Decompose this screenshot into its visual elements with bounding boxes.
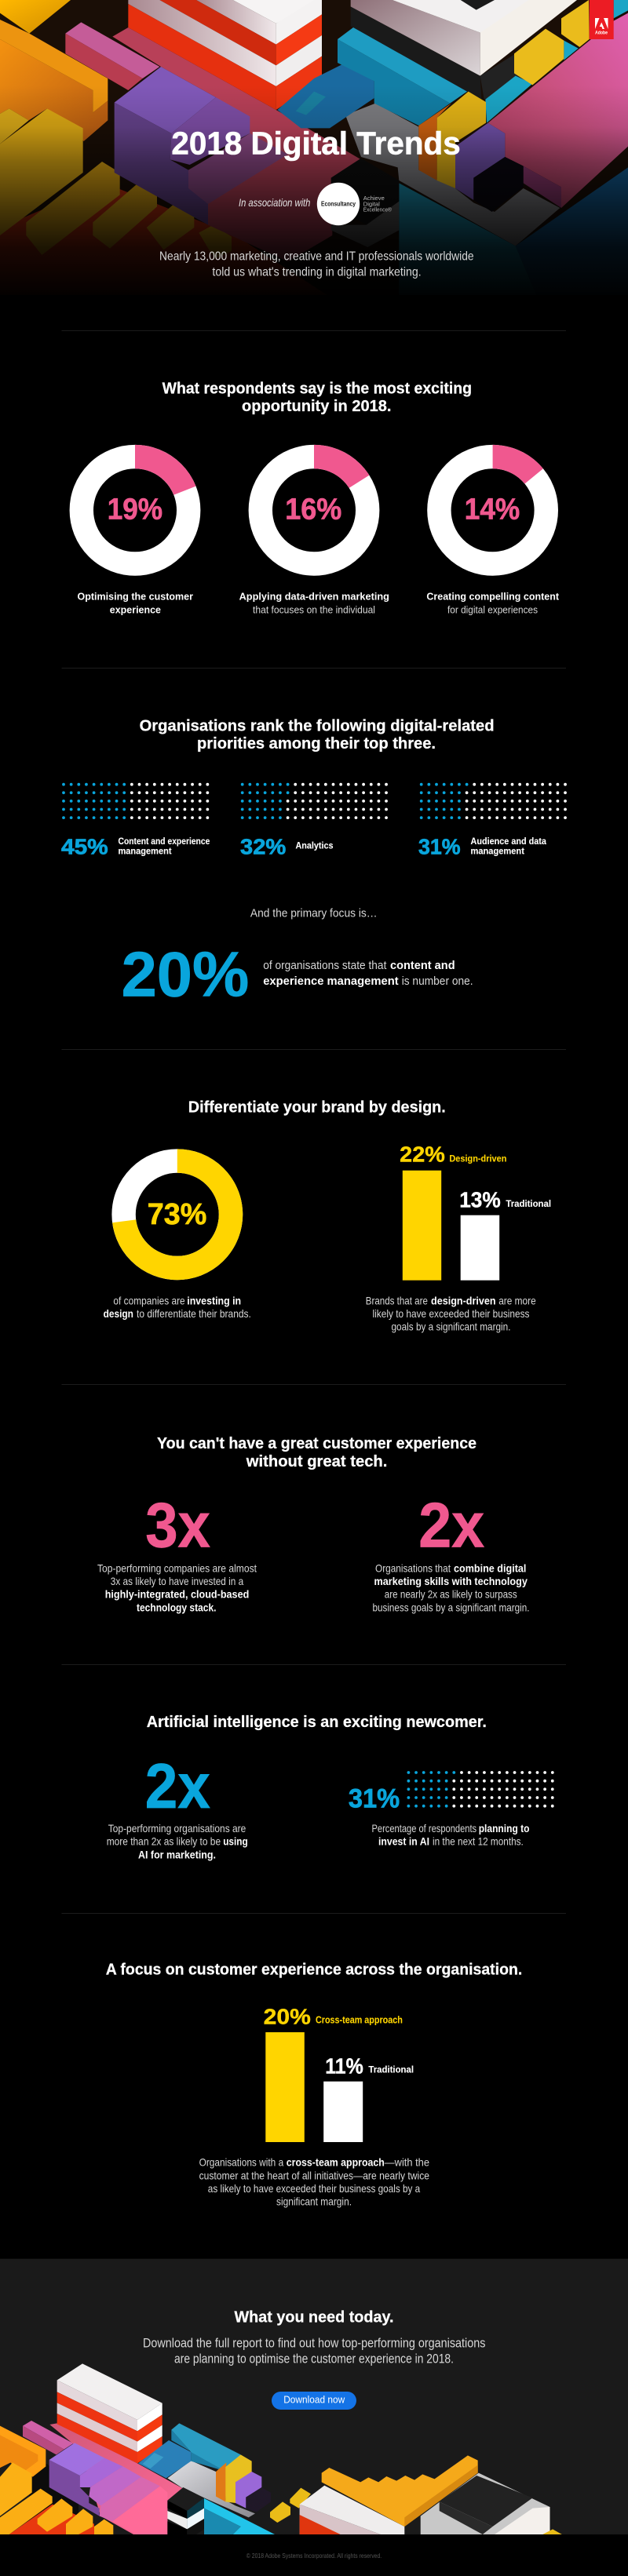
stat: 45%: Content and experience (118, 836, 210, 847)
bar chart: cross-team vs traditional: Cross-team approach (316, 2014, 403, 2026)
primary focus text: of organisations state that (263, 959, 387, 972)
text: planning to invest in AI: planning to (479, 1822, 529, 1835)
heading: Organisations rank the following digital-related (140, 717, 495, 734)
heading: Differentiate your brand by design. (188, 1099, 446, 1117)
dot grid: 45% (64, 785, 207, 818)
text: 2x explanation: business goals by a significant margin. (372, 1601, 529, 1613)
text: 3x explanation: technology stack. (137, 1601, 217, 1613)
label: data-driven: Applying data-driven marketing (239, 590, 389, 602)
heading: opportunity in 2018. (242, 398, 391, 415)
text: 2x explanation: are nearly 2x as likely to surpass (385, 1588, 517, 1601)
bar chart: cross-team vs traditional: 20% (264, 2004, 311, 2028)
download button: Download now (283, 2394, 345, 2406)
stat: 45%: management (118, 845, 171, 856)
econsultancy logo: Digital (363, 201, 380, 207)
donut caption: of companies are (113, 1294, 185, 1306)
bar chart: design-driven vs traditional: Design-driven (449, 1153, 506, 1164)
econsultancy logo: Excellence® (363, 206, 392, 213)
label: data-driven (239, 590, 389, 615)
label: compelling content (426, 590, 560, 615)
panel: artificial intelligence (107, 1714, 553, 1860)
stat: 45%: 45% (61, 834, 108, 858)
bar chart caption: as likely to have exceeded their business goals by a (208, 2182, 420, 2195)
label: compelling content: Creating compelling content (426, 590, 560, 602)
label: data-driven: that focuses on the individual (253, 603, 375, 615)
bar chart caption: customer at the heart of all initiatives—are nearly twice (199, 2169, 429, 2181)
text: planning to invest in AI: invest in AI (378, 1835, 429, 1848)
text: 3x explanation: 3x as likely to have invested in a (111, 1575, 243, 1587)
heading: without great tech. (246, 1453, 387, 1470)
bar chart caption: cross-team approach (287, 2156, 385, 2169)
bar chart: cross-team vs traditional: 11% (325, 2053, 363, 2078)
hero intro text (159, 250, 474, 279)
donut: 14% (439, 445, 546, 563)
bar chart: design-driven vs traditional: Traditional (506, 1198, 551, 1209)
bar chart: design-driven vs traditional: 13% (459, 1188, 501, 1212)
bar chart: design-driven vs traditional: 22% (400, 1142, 445, 1167)
text: 2x explanation: marketing skills with technology (374, 1575, 528, 1587)
stat: 32%: 32% (240, 834, 286, 858)
stat: 31%: 31% (418, 834, 461, 858)
big stat: 2x: 2x (145, 1751, 210, 1822)
big stat: 3x: 3x (145, 1491, 210, 1561)
bar chart caption: —with the (385, 2156, 429, 2169)
label: optimising: Optimising the customer (77, 590, 193, 602)
panel: customer experience focus (106, 1962, 522, 2208)
heading (157, 1435, 476, 1470)
copyright: © 2018 Adobe Systems Incorporated. All rights reserved. (246, 2552, 382, 2560)
bar chart caption: significant margin. (276, 2195, 352, 2208)
bar chart caption: design-driven (431, 1294, 496, 1306)
text: AI for marketing: more than 2x as likely to be (107, 1835, 221, 1848)
heading: A focus on customer experience across the organisation. (106, 1962, 522, 1979)
bar chart caption: likely to have exceeded their business (372, 1307, 529, 1320)
primary focus text (263, 959, 473, 988)
label: compelling content: for digital experiences (447, 603, 538, 615)
panel: most exciting opportunity (77, 381, 560, 615)
donut: 73%: 73% (148, 1198, 206, 1231)
association line: In association with (239, 196, 311, 209)
stat: 31%: 31% (349, 1784, 400, 1813)
panel: digital priorities (61, 717, 565, 1010)
text: 2x explanation (372, 1561, 529, 1613)
econsultancy logo: Econsultancy (321, 201, 356, 208)
heading: priorities among their top three. (197, 735, 436, 752)
text: AI for marketing (107, 1822, 248, 1860)
econsultancy logo (317, 183, 392, 225)
big stat: 2x: 2x (418, 1491, 484, 1561)
adobe logo tab: Adobe (595, 31, 608, 36)
panel: what you need today (0, 2259, 628, 2534)
adobe logo tab (590, 0, 614, 39)
donut: 16% (261, 445, 369, 563)
donut: 19%: 19% (108, 494, 162, 526)
primary focus text: is number one. (402, 975, 473, 988)
bar chart caption (366, 1294, 536, 1333)
donut caption: design (104, 1307, 133, 1320)
footer artwork: right blocks (300, 2455, 562, 2534)
stat: 31% (418, 834, 546, 858)
heading (162, 381, 472, 415)
big stat: 20%: 20% (122, 939, 249, 1010)
download text: Download the full report to find out how top-performing organisations (143, 2336, 485, 2351)
hero intro text: told us what's trending in digital marketing. (212, 266, 422, 279)
text: 3x explanation: Top-performing companies are almost (97, 1561, 257, 1574)
bar chart caption: Brands that are (366, 1294, 428, 1306)
download button (272, 2392, 356, 2410)
stat: 31%: Audience and data (471, 836, 546, 847)
download text: are planning to optimise the customer experience in 2018. (174, 2352, 454, 2366)
dot grid: 31% (422, 785, 565, 818)
download text (143, 2336, 485, 2366)
label: optimising: experience (110, 603, 161, 615)
donut caption (104, 1294, 251, 1320)
heading: You can't have a great customer experience (157, 1435, 476, 1452)
donut: 73% (112, 1149, 243, 1280)
bar chart: cross-team vs traditional (264, 2004, 414, 2142)
econsultancy logo: Achieve (363, 195, 385, 202)
text: 2x explanation: combine digital (454, 1561, 526, 1574)
panel: differentiate by design (104, 1099, 551, 1333)
primary focus text: content and (390, 959, 455, 972)
hero artwork: left blocks (0, 0, 361, 295)
text: AI for marketing: using (223, 1835, 248, 1848)
bar chart caption: Organisations with a (199, 2156, 283, 2169)
text: 3x explanation: highly-integrated, cloud-based (105, 1588, 249, 1601)
hero intro text: Nearly 13,000 marketing, creative and IT professionals worldwide (159, 250, 474, 264)
donut: 16%: 16% (285, 494, 341, 526)
bar chart caption: goals by a significant margin. (391, 1321, 510, 1333)
text: planning to invest in AI (372, 1822, 529, 1848)
bar chart caption: are more (498, 1294, 536, 1306)
hero banner (0, 0, 628, 295)
association line (239, 183, 392, 225)
stat: 32%: Analytics (295, 840, 334, 851)
text: 3x explanation (97, 1561, 257, 1613)
hero artwork: right blocks (277, 0, 628, 295)
dot grid: AI 31% (408, 1773, 553, 1806)
footer artwork: left blocks (0, 2363, 311, 2534)
heading: What respondents say is the most exciting (162, 381, 472, 398)
donut caption: to differentiate their brands. (137, 1307, 251, 1320)
hero dark gradient overlay (0, 97, 628, 295)
primary focus text: experience management (263, 975, 399, 988)
donut caption: investing in (187, 1294, 241, 1306)
primary focus lead-in: And the primary focus is… (250, 906, 378, 920)
text: planning to invest in AI: Percentage of respondents (372, 1822, 476, 1835)
donut: 14%: 14% (465, 494, 520, 526)
bar chart caption (199, 2156, 429, 2208)
title: 2018 Digital Trends (171, 126, 461, 162)
heading: What you need today. (234, 2308, 394, 2326)
bar chart: cross-team vs traditional: Traditional (368, 2064, 414, 2075)
label: optimising (77, 590, 193, 615)
stat: 32% (240, 834, 334, 858)
dot grid: 32% (243, 785, 386, 818)
text: planning to invest in AI: in the next 12 months. (433, 1835, 524, 1848)
panel: great tech (97, 1435, 529, 1613)
text: 2x explanation: Organisations that (375, 1561, 451, 1574)
bar chart: design-driven vs traditional (400, 1142, 551, 1281)
heading: Artificial intelligence is an exciting newcomer. (147, 1714, 487, 1731)
text: AI for marketing: Top-performing organisations are (108, 1822, 246, 1835)
donut: 19% (82, 445, 196, 563)
stat: 31%: management (471, 845, 524, 856)
text: AI for marketing: AI for marketing. (138, 1848, 216, 1860)
stat: 45% (61, 834, 210, 858)
heading (140, 717, 495, 752)
